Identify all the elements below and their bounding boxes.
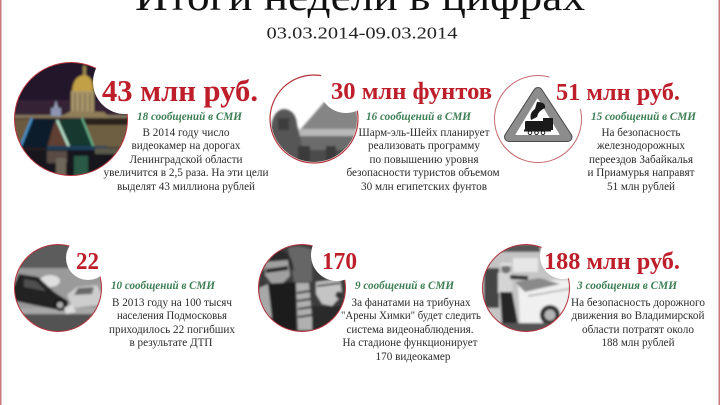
description	[109, 296, 235, 349]
description: безопасности туристов объемом	[346, 166, 500, 179]
page border right	[718, 0, 720, 405]
panel: 22 deaths	[10, 236, 235, 349]
figure: 43 млн руб.	[102, 74, 258, 108]
description: 188 млн рублей	[602, 336, 674, 349]
cutout behind figure	[319, 59, 373, 113]
description: населения Подмосковья	[117, 309, 228, 322]
figure: 30 млн фунтов	[331, 79, 492, 105]
description	[104, 126, 268, 193]
media mentions: 16 сообщений в СМИ	[366, 109, 472, 123]
photo: car crash	[14, 244, 102, 332]
panel: 188 million roubles	[482, 244, 705, 348]
cutout behind figure	[540, 233, 586, 279]
cutout behind figure	[548, 60, 598, 110]
media mentions: 9 сообщений в СМИ	[355, 278, 455, 292]
panel: 30 million pounds	[269, 74, 500, 192]
date range: 03.03.2014-09.03.2014	[266, 24, 458, 42]
description: На безопасность дорожного	[571, 296, 705, 309]
description: увеличится в 2,5 раза. На эти цели	[104, 166, 268, 179]
description: видеокамер на дорогах	[132, 139, 241, 152]
media mentions: 3 сообщения в СМИ	[576, 278, 678, 292]
description	[341, 296, 481, 363]
description: в результате ДТП	[130, 336, 213, 349]
photo: sphinx and pyramid	[268, 75, 363, 166]
description: выделят 43 миллиона рублей	[117, 180, 255, 193]
description: 170 видеокамер	[376, 350, 451, 363]
description: 51 млн рублей	[607, 180, 675, 193]
photo: St Petersburg bridge at night	[14, 62, 128, 176]
photo: traffic officer and patrol car	[482, 244, 570, 332]
description: и Приамурья направят	[588, 166, 694, 179]
media mentions: 18 сообщений в СМИ	[137, 109, 243, 123]
panel: 170 cameras	[258, 244, 481, 362]
description: реализовать программу	[368, 139, 480, 152]
figure: 22	[76, 249, 99, 275]
description: За фанатами на трибунах	[352, 296, 471, 309]
icon: railway crossing sign	[494, 76, 582, 162]
panel: 51 million roubles	[494, 60, 697, 193]
photo: football fans	[258, 244, 346, 332]
description: области потратят около	[582, 323, 694, 336]
description: На безопасность	[602, 126, 680, 139]
description: "Арены Химки" будет следить	[341, 309, 481, 322]
description: Ленинградской области	[130, 153, 242, 166]
description: система видеонаблюдения.	[346, 323, 474, 336]
cutout behind figure	[66, 236, 110, 280]
description	[346, 126, 500, 193]
cutout behind figure	[93, 50, 157, 114]
figure: 170	[322, 249, 357, 275]
page border left	[0, 0, 2, 405]
description: Шарм-эль-Шейх планирует	[358, 126, 490, 139]
description: В 2013 году на 100 тысяч	[112, 296, 232, 309]
description	[588, 126, 694, 193]
cutout behind figure	[311, 229, 363, 281]
description: На стадионе функционирует	[342, 336, 478, 349]
description: железнодорожных	[596, 139, 685, 152]
description: движения во Владимирской	[572, 309, 704, 322]
description: по повышению уровня	[370, 153, 479, 166]
description: приходилось 22 погибших	[109, 323, 235, 336]
description: В 2014 году число	[142, 126, 230, 139]
media mentions: 15 сообщений в СМИ	[591, 109, 697, 123]
description: переездов Забайкалья	[589, 153, 694, 166]
description: 30 млн египетских фунтов	[361, 180, 487, 193]
media mentions: 10 сообщений в СМИ	[111, 278, 216, 292]
figure: 51 млн руб.	[556, 79, 680, 106]
figure: 188 млн руб.	[544, 248, 680, 275]
description	[571, 296, 705, 349]
panel: 43 million roubles	[14, 62, 268, 192]
